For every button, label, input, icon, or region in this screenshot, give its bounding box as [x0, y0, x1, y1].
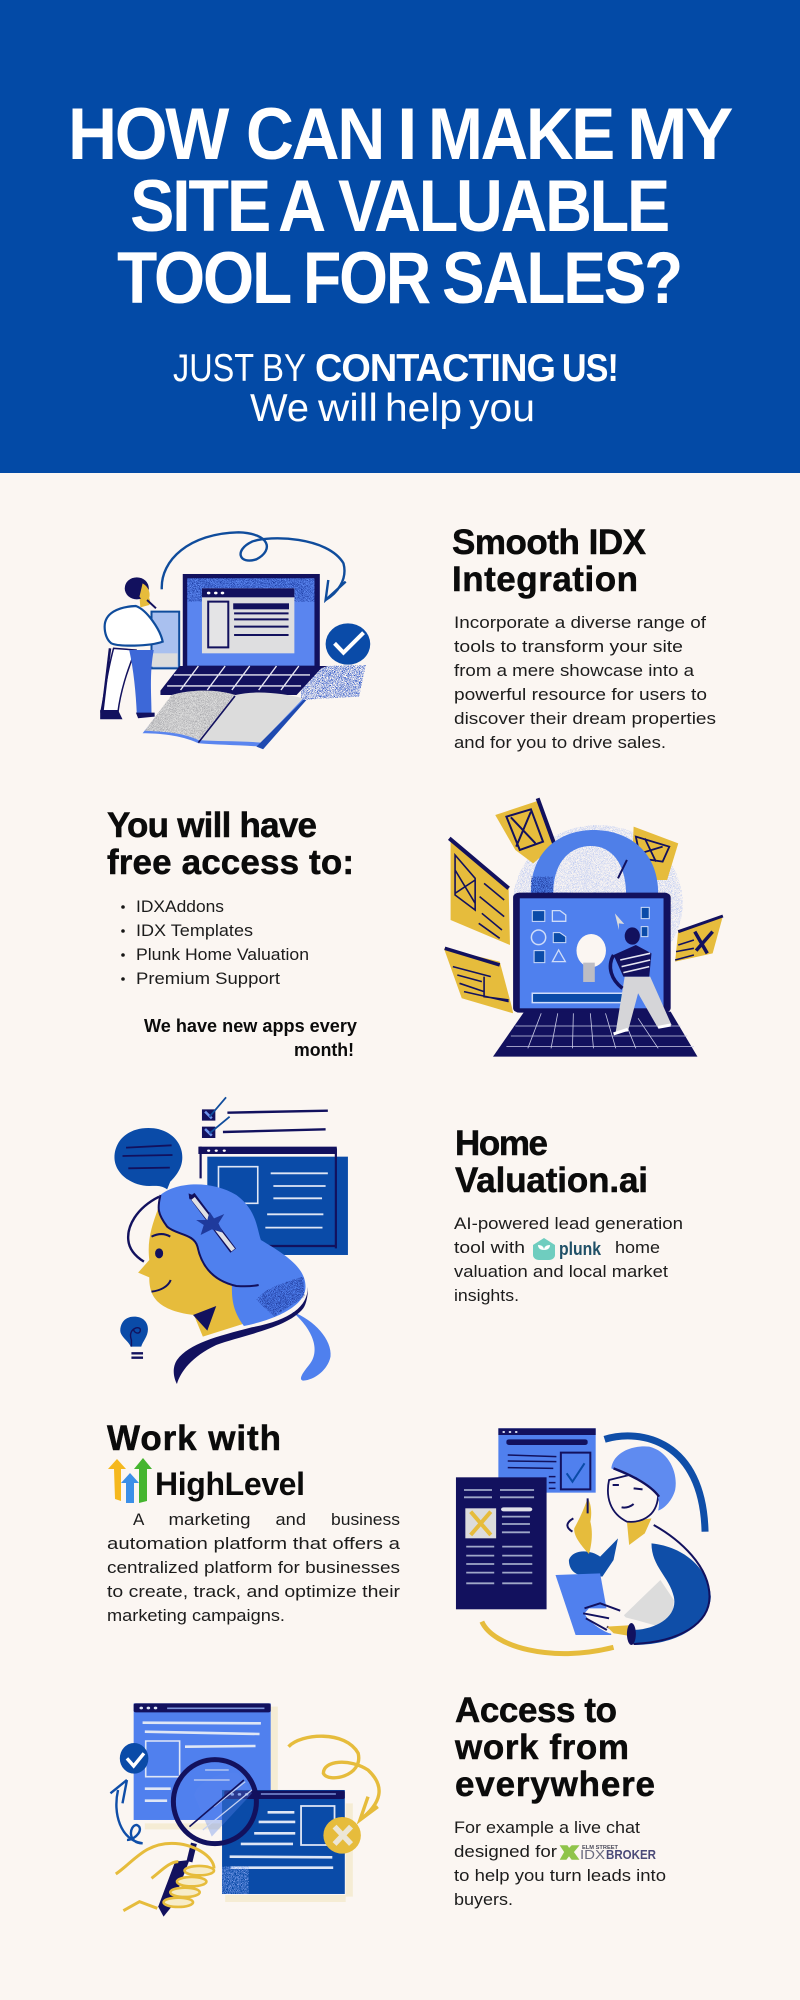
panel: free access	[107, 798, 723, 1060]
illustration: woman thinking with window	[114, 1097, 348, 1384]
logo: IDX Broker: ELM STREET	[582, 1845, 618, 1851]
body text: from a mere showcase into a	[454, 661, 695, 680]
heading: Access to	[455, 1691, 617, 1730]
heading	[452, 523, 647, 599]
note: new apps	[144, 1016, 357, 1060]
heading: Work with	[107, 1419, 281, 1458]
panel: smooth IDX integration	[100, 523, 716, 752]
body text: automation platform that offers a	[107, 1534, 401, 1553]
logo: plunk: plunk	[559, 1239, 602, 1259]
heading: Integration	[452, 560, 638, 599]
bullet list: Plunk Home Valuation	[136, 945, 309, 964]
title: FOR	[303, 238, 431, 319]
title: A	[278, 166, 325, 247]
title	[68, 94, 733, 319]
body text	[454, 1214, 683, 1305]
logo: plunk	[533, 1238, 602, 1260]
panel: work from everywhere	[110, 1691, 666, 1917]
subtitle: We	[250, 387, 309, 430]
illustration: magnifier over web windows	[110, 1703, 379, 1917]
body text	[454, 1818, 666, 1909]
title: I	[397, 94, 415, 175]
title: CAN	[246, 94, 383, 175]
subtitle: help	[385, 387, 462, 430]
body text: A	[133, 1510, 145, 1529]
heading: Home	[455, 1124, 548, 1163]
panel: work with HighLevel	[107, 1419, 711, 1654]
body text: centralized platform for businesses	[107, 1558, 400, 1577]
logo: IDX Broker: BROKER	[606, 1847, 657, 1862]
body text: home	[615, 1238, 660, 1257]
title: SITE	[130, 166, 269, 247]
body text: powerful resource for users to	[454, 685, 707, 704]
title: MAKE	[428, 94, 613, 175]
note: new apps: month!	[294, 1040, 354, 1060]
heading	[455, 1124, 648, 1200]
logo: IDX Broker	[561, 1845, 657, 1862]
body text: marketing	[168, 1510, 250, 1529]
subtitle: US!	[562, 347, 618, 390]
subtitle: CONTACTING	[315, 347, 555, 390]
body text: designed for	[454, 1842, 557, 1861]
logo: HighLevel: HighLevel	[155, 1466, 305, 1502]
heading: Smooth IDX	[452, 523, 647, 562]
title: MY	[627, 94, 733, 175]
subtitle: will	[317, 387, 378, 430]
body text: tool with	[454, 1238, 525, 1257]
body text	[454, 613, 716, 752]
body text: business	[331, 1510, 400, 1529]
illustration: padlock laptop	[444, 798, 723, 1057]
body text: insights.	[454, 1286, 519, 1305]
header banner	[0, 0, 800, 473]
title: VALUABLE	[338, 166, 668, 247]
title: HOW	[68, 94, 229, 175]
heading: everywhere	[455, 1765, 655, 1804]
title: TOOL	[117, 238, 291, 319]
body text: Incorporate a diverse range of	[454, 613, 706, 632]
heading: work from	[454, 1728, 629, 1767]
body text: marketing campaigns.	[107, 1606, 285, 1625]
illustration: woman with clipboard and documents	[456, 1428, 711, 1654]
panel: home valuation	[114, 1097, 683, 1384]
body text: For example a live chat	[454, 1818, 640, 1837]
subtitle	[173, 347, 618, 430]
bullet list: Premium Support	[136, 969, 280, 988]
body text: discover their dream properties	[454, 709, 716, 728]
subtitle: BY	[262, 347, 306, 390]
logo: IDX Broker: IDX	[580, 1847, 605, 1862]
body text: buyers.	[454, 1890, 513, 1909]
body text: tools to transform your site	[454, 637, 683, 656]
illustration: person at laptop with book	[100, 532, 370, 749]
bullet list: IDXAddons	[136, 897, 224, 916]
heading: free access to:	[107, 843, 354, 882]
heading	[454, 1691, 655, 1804]
body text: to help you turn leads into	[454, 1866, 666, 1885]
body text: valuation and local market	[454, 1262, 668, 1281]
body text: AI-powered lead generation	[454, 1214, 683, 1233]
title: SALES?	[442, 238, 681, 319]
heading: Valuation.ai	[455, 1161, 648, 1200]
heading	[107, 806, 354, 882]
logo: HighLevel	[108, 1458, 305, 1503]
body text: to create, track, and optimize their	[107, 1582, 400, 1601]
body text: and for you to drive sales.	[454, 733, 666, 752]
bullet list	[121, 897, 309, 988]
subtitle: you	[469, 387, 535, 430]
bullet list: IDX Templates	[136, 921, 253, 940]
subtitle: JUST	[173, 347, 254, 390]
body text: and	[276, 1510, 306, 1529]
heading: You will have	[107, 806, 317, 845]
note: new apps: We have new apps every	[144, 1016, 357, 1036]
body text	[107, 1510, 401, 1625]
